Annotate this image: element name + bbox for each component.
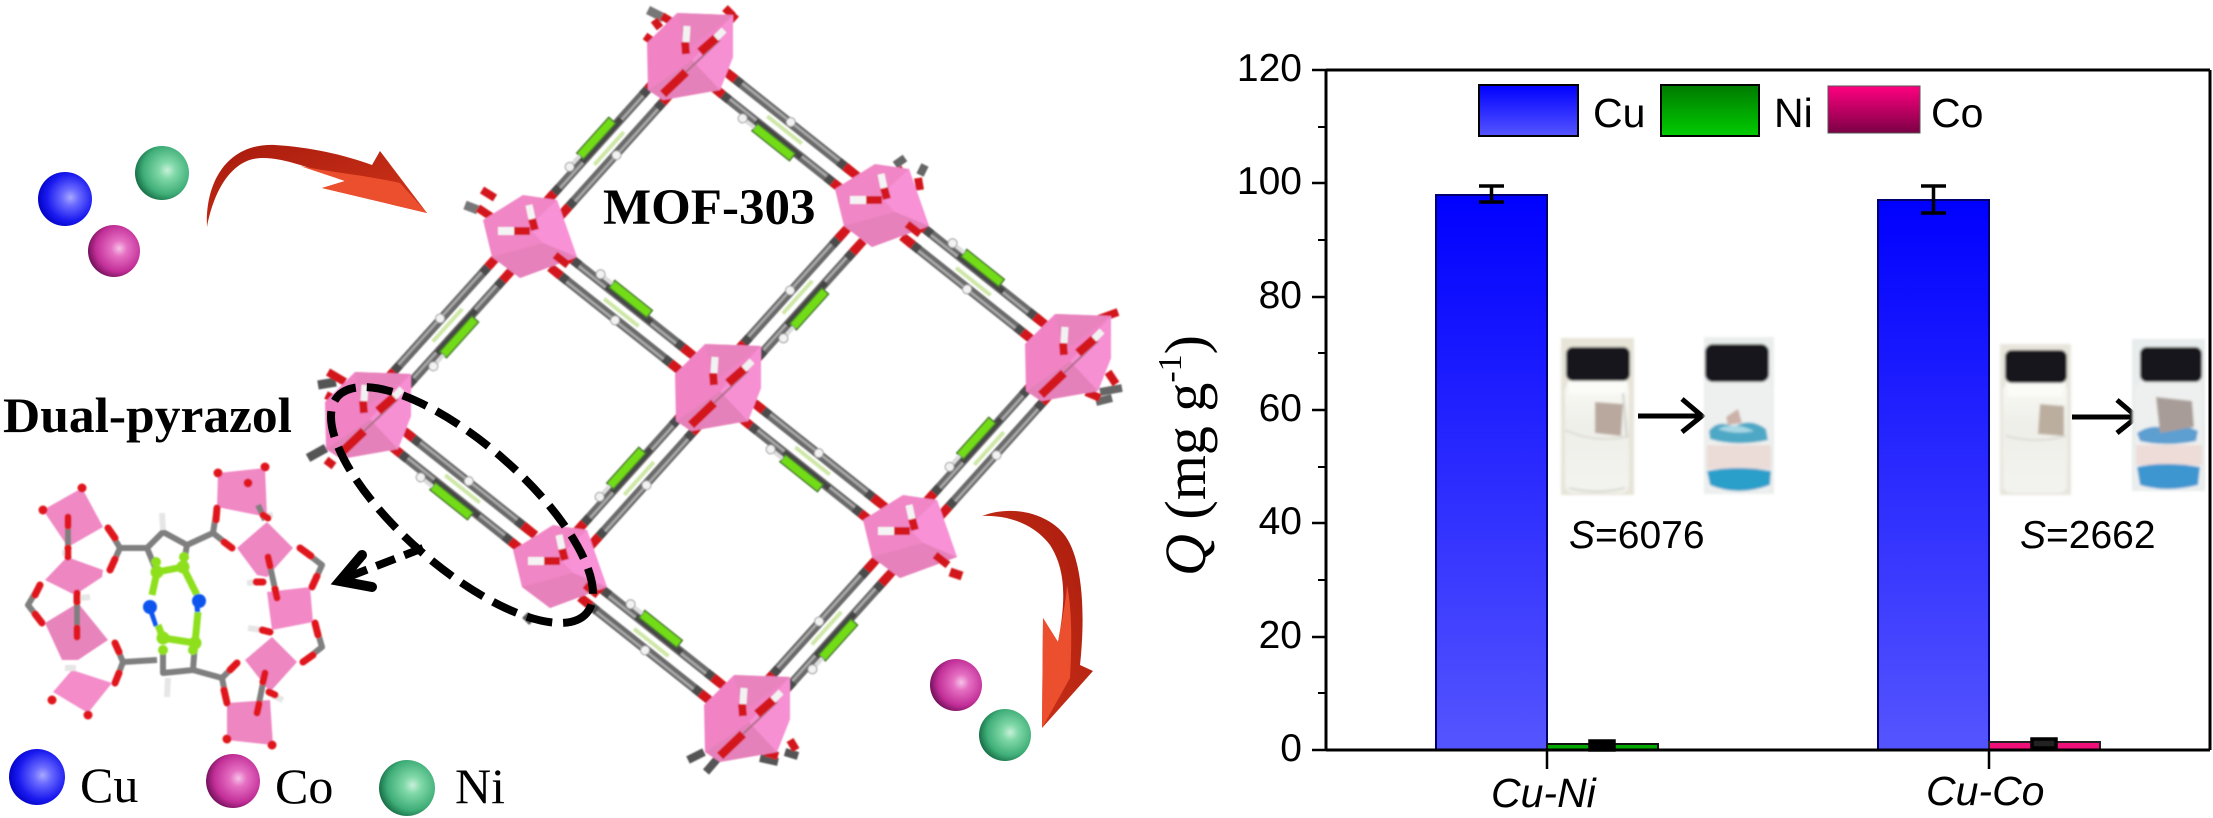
chart legend: [1479, 85, 1983, 136]
y-axis title: Q (mg g: [1153, 383, 1218, 576]
linker: lower-left to bottom node: [577, 573, 732, 707]
arrow between Cu-Co vials: [2072, 400, 2137, 433]
error bars: [1479, 186, 2056, 750]
bar: Cu in Cu-Ni: [1436, 195, 1547, 750]
green carbon atoms: [150, 552, 202, 655]
node: top: [645, 8, 736, 100]
x-axis category labels: Cu-Co: [1926, 768, 2044, 814]
pink polyhedra: [43, 468, 313, 745]
red oxygen bonds and atoms: [35, 508, 318, 713]
incoming ions: Cu, Ni, Co spheres: [38, 146, 189, 277]
legend swatch: Ni: [1661, 85, 1759, 136]
legend swatch: Co: [1828, 86, 1920, 133]
y-axis tick labels: 20: [1259, 614, 1302, 657]
arrow: metal ions leaving: [982, 511, 1093, 728]
vial photo: Cu-Co before: [2000, 344, 2071, 495]
y-axis tick labels: 60: [1259, 387, 1302, 430]
linker: left to lower-left node: [383, 425, 539, 559]
linker: top to upper-left node: [537, 70, 677, 221]
linker: top to upper-right node: [705, 66, 861, 200]
legend label: Ni: Ni: [1774, 90, 1813, 136]
hydrogen atoms: [62, 513, 283, 700]
selectivity label: S=6076: S=6076: [1569, 514, 1705, 557]
legend: Co sphere and label: Co: [275, 758, 333, 814]
linker: upper-right to right node: [899, 212, 1054, 346]
arrow: metal ions entering: [207, 145, 427, 227]
node: upper-right: [835, 158, 929, 247]
y-axis tick labels: 120: [1237, 47, 1302, 90]
legend swatch: Cu: [1479, 85, 1578, 136]
vial photo: Cu-Ni before: [1561, 338, 1634, 495]
bar: Ni in Cu-Ni: [1547, 744, 1658, 750]
legend: Cu sphere and label: Cu: [80, 757, 138, 813]
legend label: Co: Co: [1931, 90, 1983, 136]
node: lower-right: [863, 495, 962, 578]
y-axis title: ): [1153, 335, 1218, 354]
grey carbon bonds: [28, 505, 322, 713]
linker: bottom to lower-right node: [760, 555, 900, 705]
bar: Cu in Cu-Co: [1878, 200, 1989, 750]
node: bottom: [688, 675, 798, 772]
bar chart: [1237, 47, 2210, 816]
legend: Ni sphere and label: Ni: [455, 758, 505, 814]
axes frame: [1312, 70, 2210, 769]
linker: upper-left to left node: [381, 252, 521, 402]
linker: lower-right to right node: [917, 370, 1057, 521]
x-axis category labels: Cu-Ni: [1491, 770, 1598, 816]
node: upper-left: [465, 190, 577, 278]
MOF-303 framework lattice: [308, 8, 1122, 772]
green pyrazole bonds: [152, 567, 198, 643]
heading: MOF-303: MOF-303: [603, 180, 815, 236]
selectivity label: S=2662: S=2662: [2020, 514, 2156, 557]
dashed ellipse highlighting the linker: [297, 350, 627, 660]
arrow between Cu-Ni vials: [1638, 399, 1702, 432]
linker: centre to upper-right node: [731, 224, 871, 374]
heading: Dual-pyrazol: Dual-pyrazol: [3, 387, 292, 443]
dual-pyrazol fragment structure: [28, 462, 322, 750]
corner oxygen atoms: [38, 462, 276, 750]
node: left: [308, 372, 411, 466]
node: right: [1025, 312, 1122, 402]
linker: upper-left to centre node: [547, 243, 702, 377]
legend label: Cu: Cu: [1593, 90, 1645, 136]
rejected ions: Co, Ni spheres: [930, 659, 1031, 761]
legend: Cu sphere and label: [9, 749, 138, 813]
dashed arrow to dual-pyrazol fragment: [340, 548, 423, 587]
vial photo: Cu-Ni after: [1704, 337, 1774, 494]
vial photo: Cu-Co after: [2132, 339, 2205, 491]
y-axis tick labels: 80: [1259, 274, 1302, 317]
y-axis tick labels: 100: [1237, 160, 1302, 203]
node: centre: [675, 344, 761, 431]
y-axis title: -1: [1152, 354, 1189, 383]
blue nitrogen atoms: [143, 594, 206, 627]
y-axis tick labels: 0: [1280, 727, 1302, 770]
y-axis tick labels: 40: [1259, 500, 1302, 543]
legend: Co sphere and label: [206, 754, 333, 814]
linker: lower-left to centre node: [567, 400, 707, 551]
legend: Ni sphere and label: [379, 758, 505, 816]
y-axis tick labels: [1237, 47, 1302, 770]
bar: Co in Cu-Co: [1989, 742, 2100, 750]
linker: centre to lower-right node: [733, 397, 889, 531]
x-axis category labels: [1491, 768, 2044, 816]
node: lower-left: [513, 525, 607, 622]
